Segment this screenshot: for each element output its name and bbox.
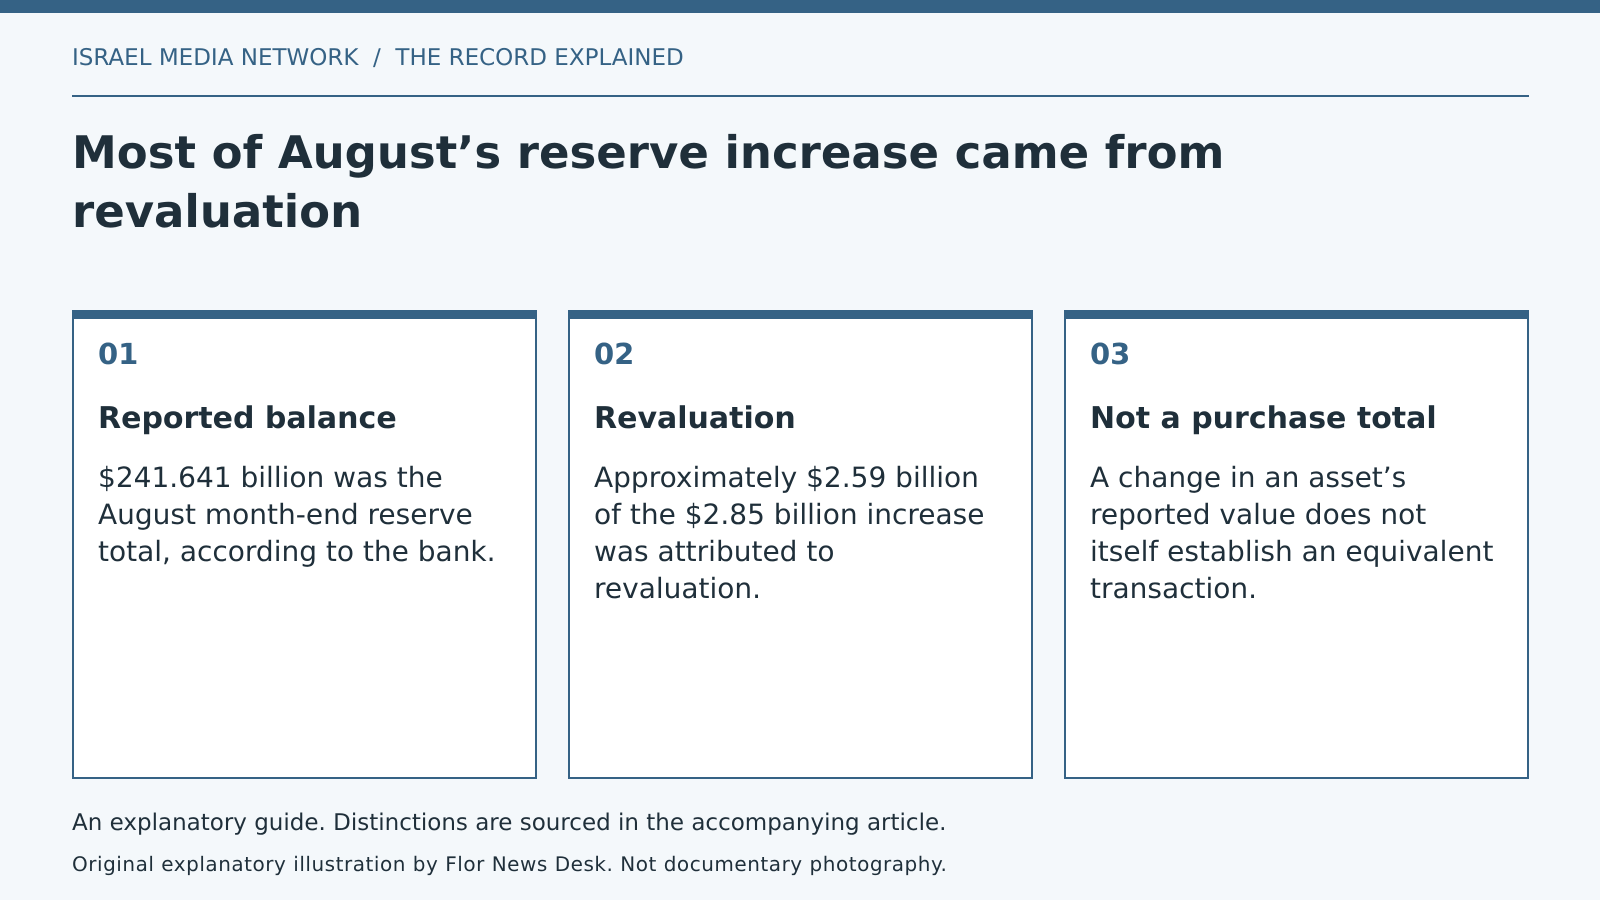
title	[72, 126, 1224, 238]
card text: reported balance	[98, 461, 496, 568]
panel: revaluation	[568, 310, 1033, 779]
title: Most of August’s reserve increase came from	[72, 126, 1224, 179]
card text: revaluation: was attributed to	[594, 535, 834, 568]
card text: reported balance: $241.641 billion was the	[98, 461, 443, 494]
card number 02: 02	[594, 337, 634, 371]
illustration credit: Original explanatory illustration by Flor News Desk. Not documentary photography.	[72, 852, 947, 876]
card text: not a purchase total: reported value does not	[1090, 498, 1426, 531]
card text: reported balance: August month-end reserve	[98, 498, 473, 531]
card heading: not a purchase total: Not a purchase total	[1090, 401, 1437, 436]
card text: reported balance: total, according to the bank.	[98, 535, 496, 568]
panel: reported balance	[72, 310, 537, 779]
card text: revaluation: revaluation.	[594, 572, 761, 605]
card text: not a purchase total: itself establish an equivalent	[1090, 535, 1493, 568]
eyebrow: publication and section: ISRAEL MEDIA NETWORK / THE RECORD EXPLAINED	[72, 45, 684, 71]
card text: revaluation: Approximately $2.59 billion	[594, 461, 979, 494]
card text: revaluation	[594, 461, 984, 605]
card text: not a purchase total: transaction.	[1090, 572, 1257, 605]
top accent bar	[0, 0, 1600, 13]
footer note: An explanatory guide. Distinctions are sourced in the accompanying article.	[72, 810, 946, 836]
panel: not a purchase total	[1064, 310, 1529, 779]
card heading: reported balance: Reported balance	[98, 401, 397, 436]
card text: revaluation: of the $2.85 billion increase	[594, 498, 984, 531]
card text: not a purchase total: A change in an asset’s	[1090, 461, 1406, 494]
card heading: revaluation: Revaluation	[594, 401, 796, 436]
card number 01: 01	[98, 337, 138, 371]
card number 03: 03	[1090, 337, 1130, 371]
card text: not a purchase total	[1090, 461, 1493, 605]
title: revaluation	[72, 185, 362, 238]
